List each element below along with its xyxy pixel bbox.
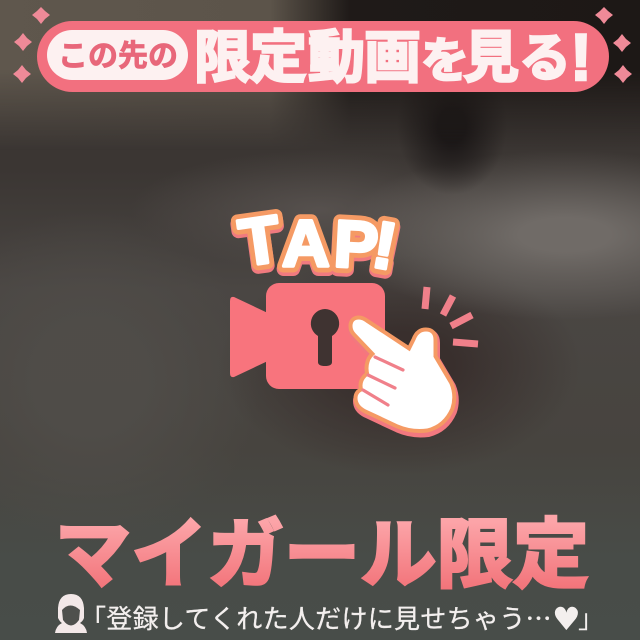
- banner headline: 画: [364, 12, 421, 94]
- icon: pointing hand: [353, 320, 453, 432]
- sparkles right: [595, 7, 632, 83]
- banner headline: を: [421, 21, 469, 91]
- camera body: [266, 283, 385, 389]
- keyhole: [311, 309, 339, 366]
- camera lens: [230, 297, 270, 377]
- white label pill: この先の: [58, 40, 178, 73]
- banner headline: る: [519, 16, 571, 91]
- main heading: マイガール限定: [55, 513, 589, 598]
- white label pill: [47, 30, 188, 80]
- top banner: [37, 12, 609, 94]
- icon: tap motion lines: [425, 287, 478, 344]
- banner headline: !: [570, 20, 592, 94]
- TAP label: TAP!: [235, 201, 402, 284]
- icon: woman silhouette: [55, 594, 87, 633]
- sparkles left: [13, 7, 50, 83]
- banner headline: 見: [463, 13, 519, 94]
- TAP label: TAP!: [235, 201, 402, 284]
- banner headline: 定: [250, 12, 307, 94]
- subtitle quote: 」: [578, 599, 604, 636]
- blurred background top band: [0, 0, 640, 131]
- icon: locked video camera: [230, 283, 385, 389]
- TAP label: TAP!: [235, 204, 402, 287]
- subtitle quote: 「登録してくれた人だけに見せちゃう…: [80, 599, 552, 636]
- banner pill: [37, 21, 609, 92]
- subtitle quote: ♥: [552, 600, 581, 638]
- banner headline: 限: [194, 12, 251, 94]
- banner headline: 動: [308, 12, 365, 94]
- banner headline: [194, 12, 592, 94]
